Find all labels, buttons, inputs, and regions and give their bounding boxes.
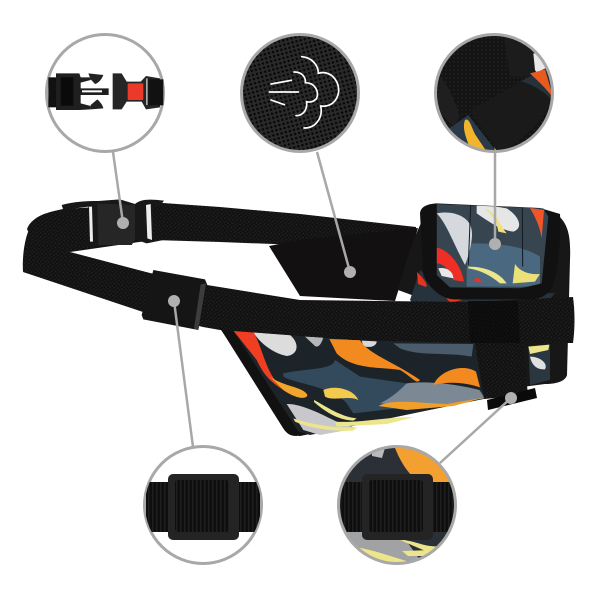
- circle frame: [338, 446, 456, 564]
- icon: air flow cloud: [269, 57, 339, 128]
- mesh texture circle: [242, 34, 358, 152]
- product: muzzle and straps: [23, 199, 575, 436]
- callout: buckle: [46, 34, 164, 229]
- velcro detail photo: [437, 36, 551, 150]
- lower camo panel: [220, 328, 550, 436]
- belt buckle: [62, 199, 164, 247]
- circle frame: [46, 34, 164, 152]
- leader line: [113, 152, 123, 223]
- callout: lower slider: [338, 392, 517, 566]
- marker dot: [117, 217, 129, 229]
- slider on camo detail photo: [338, 446, 458, 566]
- muzzle body right side: [398, 213, 570, 390]
- marker dot: [489, 238, 501, 250]
- back strap: [27, 203, 416, 252]
- leader line: [317, 152, 350, 272]
- callout: velcro closure: [434, 33, 555, 250]
- top flap: [420, 202, 560, 299]
- small buckle: [487, 388, 537, 410]
- slider buckle: [142, 270, 207, 330]
- marker dot: [344, 266, 356, 278]
- leader line: [174, 301, 193, 447]
- callout: breathable mesh: [242, 34, 358, 278]
- front strap: [23, 232, 575, 343]
- marker dot: [168, 295, 180, 307]
- leader line: [440, 398, 511, 463]
- circle frame: [144, 446, 262, 564]
- icon: open buckle: [48, 73, 163, 110]
- circle frame: [436, 34, 552, 152]
- leader line: [494, 152, 496, 244]
- slider detail photo: [146, 474, 260, 540]
- callout: strap slider: [144, 295, 262, 564]
- vertical strap: [468, 301, 528, 399]
- mesh panel: [269, 228, 418, 301]
- marker dot: [505, 392, 517, 404]
- camo under flap: [410, 270, 555, 312]
- lower panel binding: [220, 328, 297, 436]
